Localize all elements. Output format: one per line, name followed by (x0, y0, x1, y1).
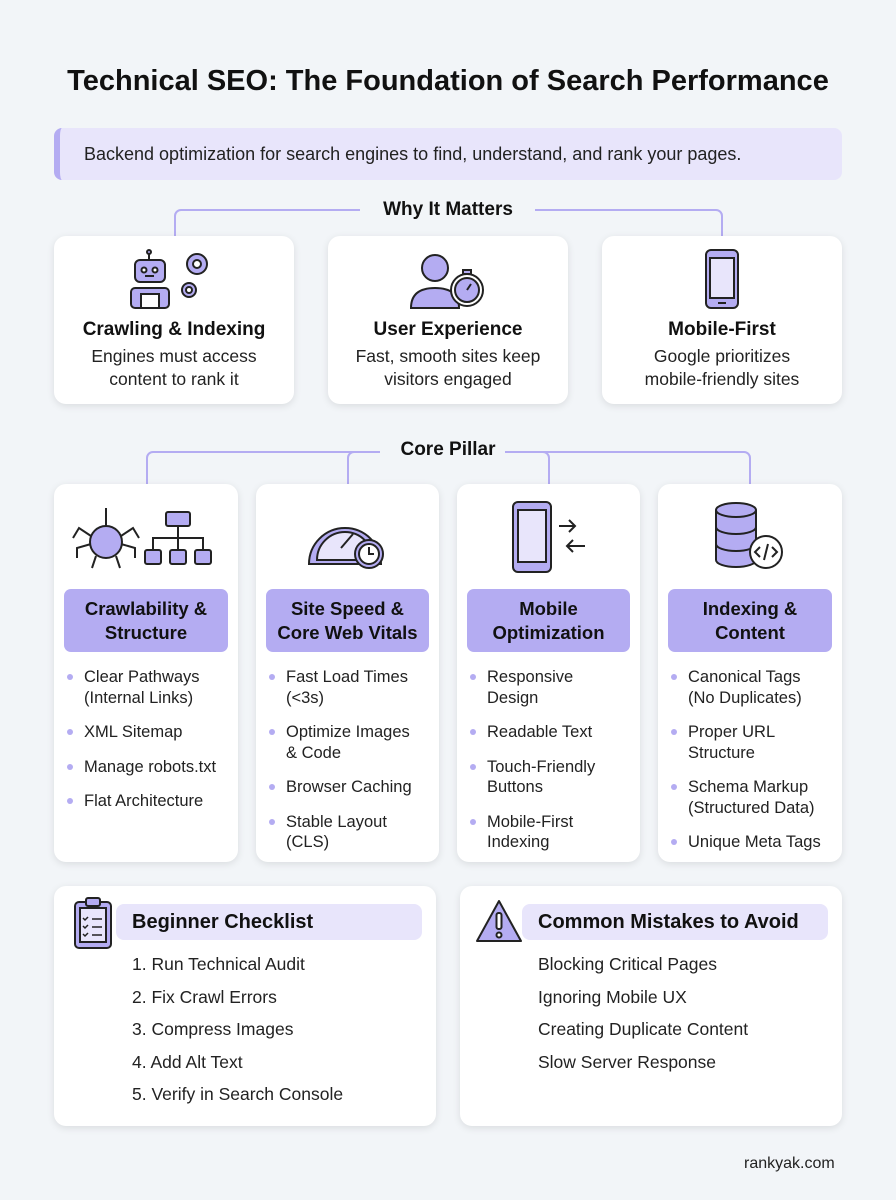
list: Design (487, 688, 538, 706)
list: Buttons (487, 778, 543, 796)
panel: beginner checklist (54, 886, 436, 1126)
card: crawling & indexing (54, 236, 294, 404)
heading: Beginner Checklist (132, 911, 313, 933)
connector: core pillar (146, 451, 751, 484)
list: Blocking Critical Pages (538, 954, 717, 974)
list: 5. Verify in Search Console (132, 1084, 343, 1104)
list (132, 954, 343, 1104)
subtitle banner: Backend optimization for search engines to find, understand, and rank your pages. (84, 144, 741, 164)
list: XML Sitemap (84, 723, 182, 741)
icon: phone arrows (512, 501, 585, 573)
list: Clear Pathways (84, 668, 200, 686)
list: 3. Compress Images (132, 1019, 293, 1039)
list: Slow Server Response (538, 1052, 716, 1072)
label: Indexing & (703, 598, 797, 619)
list: Creating Duplicate Content (538, 1019, 748, 1039)
list: Browser Caching (286, 778, 412, 796)
icon: warning (476, 900, 522, 942)
label (266, 589, 429, 652)
icon: user stopwatch (410, 254, 484, 309)
list: Proper URL (688, 723, 775, 741)
heading (522, 904, 828, 940)
list: (No Duplicates) (688, 688, 802, 706)
card: mobile-first: Google prioritizes (654, 346, 790, 366)
label: Content (715, 622, 785, 643)
list (671, 668, 821, 851)
list: (CLS) (286, 833, 329, 851)
list: 4. Add Alt Text (132, 1052, 243, 1072)
title: Technical SEO: The Foundation of Search Performance (67, 65, 829, 97)
card: mobile-first: Mobile-First (668, 319, 776, 340)
icon: gauge clock (308, 527, 384, 569)
list: Optimize Images (286, 723, 410, 741)
list: (Internal Links) (84, 688, 193, 706)
list: Manage robots.txt (84, 758, 216, 776)
label: Structure (105, 622, 187, 643)
list: Fast Load Times (286, 668, 408, 686)
icon: clipboard (74, 897, 112, 949)
list: Flat Architecture (84, 792, 203, 810)
label: Mobile (519, 598, 578, 619)
card: crawling & indexing: content to rank it (109, 369, 239, 389)
label: Crawlability & (85, 598, 207, 619)
icon: phone (705, 249, 739, 309)
list: Indexing (487, 833, 549, 851)
list: Responsive (487, 668, 573, 686)
list: Structure (688, 744, 755, 762)
list: 1. Run Technical Audit (132, 954, 305, 974)
label: Core Web Vitals (277, 622, 418, 643)
list (269, 668, 412, 851)
card: user experience: visitors engaged (384, 369, 512, 389)
heading (116, 904, 422, 940)
footer: rankyak.com (744, 1155, 835, 1172)
label (64, 589, 228, 652)
list: Readable Text (487, 723, 592, 741)
label: Site Speed & (291, 598, 404, 619)
list: & Code (286, 744, 341, 762)
list: 2. Fix Crawl Errors (132, 987, 277, 1007)
card: user experience: User Experience (374, 319, 522, 340)
list: Schema Markup (688, 778, 808, 796)
pillar: crawlability (54, 484, 238, 862)
heading: why it matters: Why It Matters (383, 199, 513, 220)
connector: why it matters (174, 209, 723, 236)
list: Touch-Friendly (487, 758, 595, 776)
card: crawling & indexing: Engines must access (91, 346, 257, 366)
list (538, 954, 748, 1072)
list (470, 668, 596, 851)
label (467, 589, 630, 652)
heading: Common Mistakes to Avoid (538, 911, 799, 933)
icon: spider sitemap (72, 508, 212, 568)
list: Stable Layout (286, 812, 387, 830)
list: (Structured Data) (688, 798, 815, 816)
card: mobile-first: mobile-friendly sites (645, 369, 799, 389)
icon: database code (715, 502, 783, 569)
list: Canonical Tags (688, 668, 801, 686)
card: user experience: Fast, smooth sites keep (356, 346, 540, 366)
pillar: indexing (658, 484, 842, 862)
list: Ignoring Mobile UX (538, 987, 687, 1007)
card: crawling & indexing: Crawling & Indexing (83, 319, 265, 340)
heading: core pillar: Core Pillar (400, 439, 496, 460)
list (67, 668, 216, 810)
label (668, 589, 832, 652)
label: Optimization (492, 622, 605, 643)
card: user experience (328, 236, 568, 404)
subtitle banner (54, 128, 842, 180)
panel: common mistakes (460, 886, 842, 1126)
list: Mobile-First (487, 812, 573, 830)
list: (<3s) (286, 688, 324, 706)
pillar: site speed (256, 484, 439, 862)
pillar: mobile (457, 484, 640, 862)
card: mobile-first (602, 236, 842, 404)
list: Unique Meta Tags (688, 833, 821, 851)
icon: robot gears (130, 249, 208, 309)
